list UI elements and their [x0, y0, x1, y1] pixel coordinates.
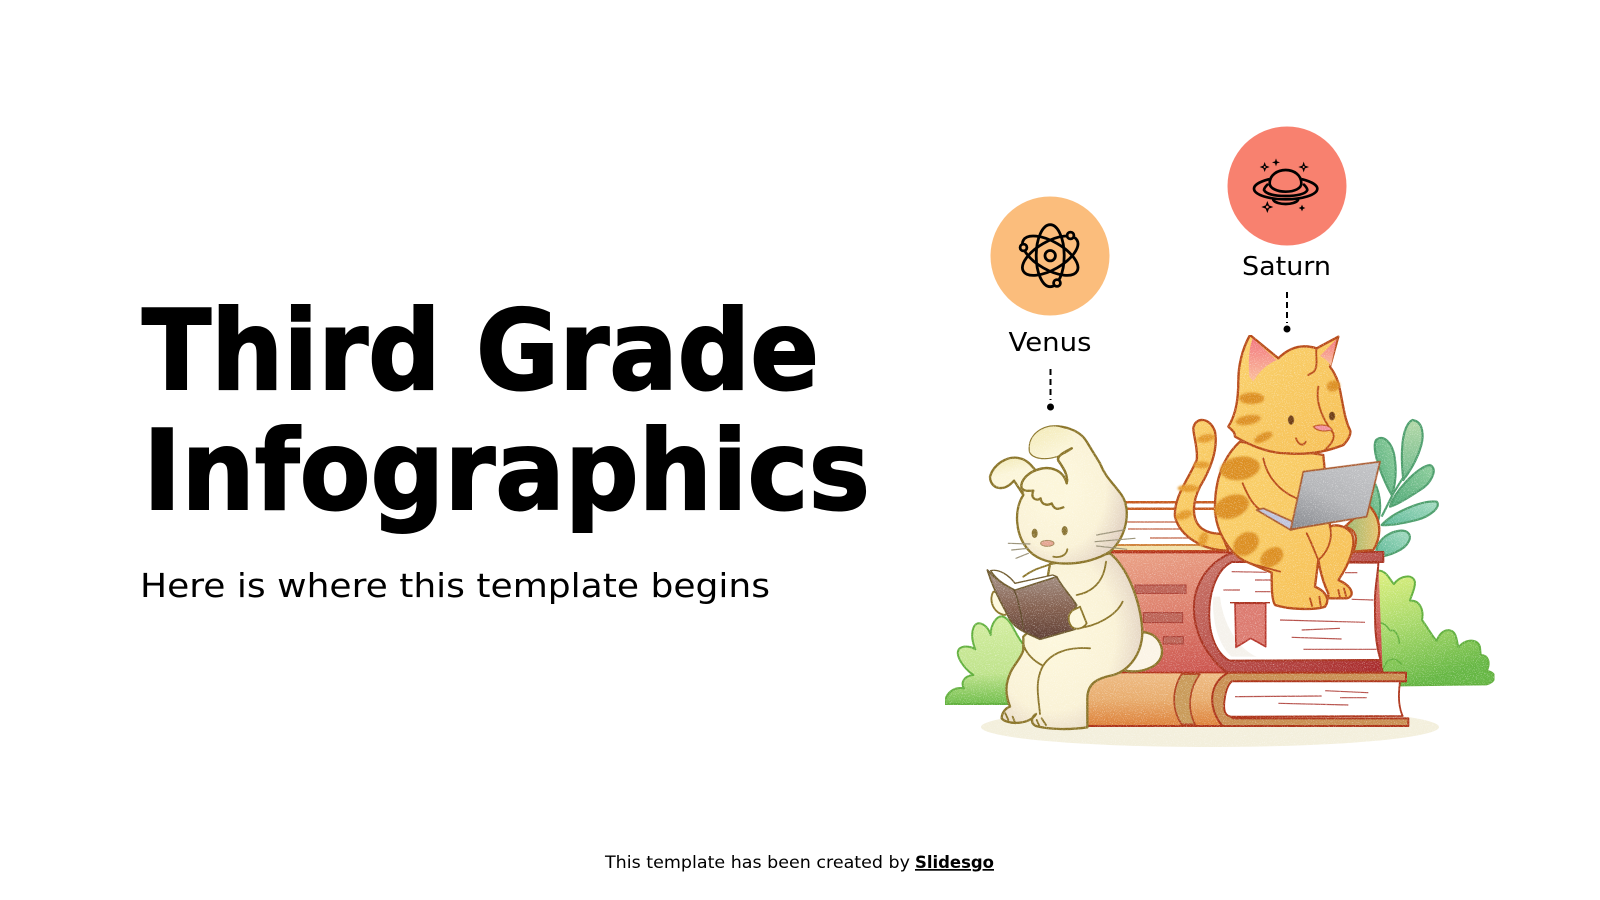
- ground shadow: [981, 707, 1439, 747]
- title: Infographics: [143, 407, 870, 536]
- illustration: rabbit and cat on books: [945, 335, 1494, 747]
- bookmark: [1235, 603, 1266, 647]
- label: Saturn: Saturn: [1242, 252, 1331, 282]
- cat back leg behind laptop: [1345, 505, 1379, 552]
- red cover with curved spine edge: [1194, 552, 1383, 673]
- bush: right: [1375, 571, 1494, 685]
- cat head: [1228, 335, 1350, 454]
- rabbit tail: [1125, 632, 1162, 671]
- rabbit book: [987, 570, 1077, 639]
- character: cat with laptop: [1174, 335, 1380, 609]
- dashed connector: [1047, 369, 1054, 410]
- plant leaves: [1367, 420, 1438, 556]
- book: large red spine book: [1103, 552, 1383, 673]
- character: rabbit reading: [987, 426, 1162, 729]
- rabbit head: [1017, 426, 1127, 564]
- book: bottom orange book: [1088, 673, 1408, 726]
- callout: Venus: [990, 196, 1110, 410]
- dashed connector: [1284, 292, 1290, 332]
- footer credit: This template has been created by: [604, 853, 910, 873]
- icon: ringed planet in coral circle: [1228, 126, 1346, 246]
- title: [142, 287, 870, 536]
- cat tail: [1175, 420, 1228, 551]
- rabbit hands: [991, 592, 1015, 615]
- page block: [1209, 562, 1381, 661]
- rabbit body: [1002, 553, 1142, 729]
- subtitle: Here is where this template begins: [140, 566, 770, 605]
- label: Venus: Venus: [1008, 328, 1092, 358]
- book: top pages behind cat: [1105, 501, 1225, 553]
- icon: atom in orange circle: [990, 196, 1110, 316]
- callout: Saturn: [1228, 126, 1346, 332]
- bush: left: [945, 616, 1027, 704]
- footer credit: Slidesgo: [915, 853, 994, 873]
- title: Third Grade: [142, 287, 819, 416]
- laptop: [1257, 462, 1380, 530]
- cat body: [1215, 442, 1353, 609]
- rabbit ear: back: [990, 458, 1036, 495]
